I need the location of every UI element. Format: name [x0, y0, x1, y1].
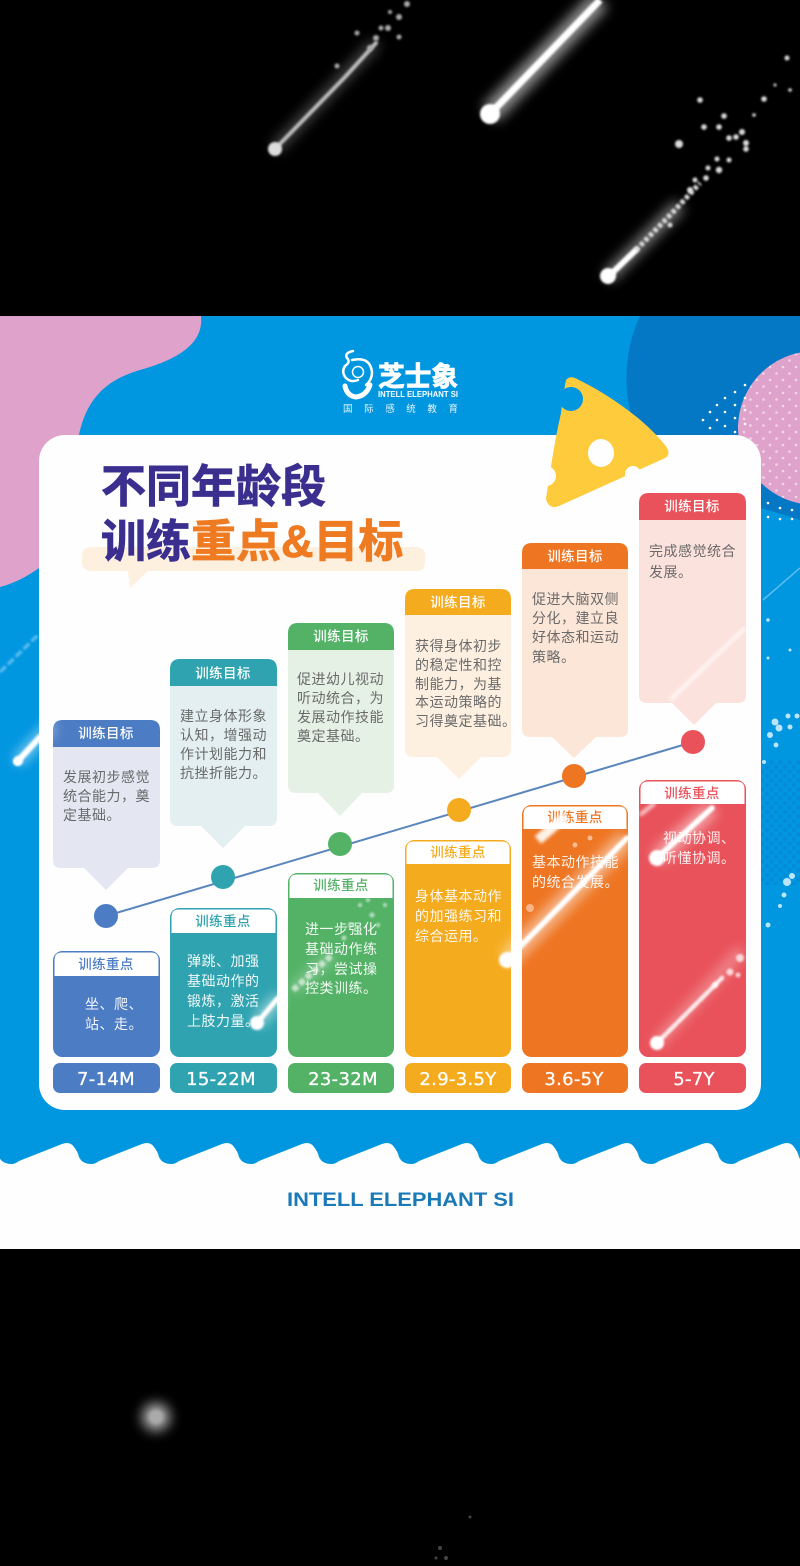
goal callout: 定基础。	[63, 807, 121, 823]
timeline line	[106, 742, 693, 916]
column 5: 3.6-5Y	[522, 543, 628, 1093]
focus box: 身体基本动作	[415, 888, 502, 904]
halftone dots	[702, 384, 793, 520]
focus box: 基础动作的	[187, 973, 260, 989]
title	[82, 461, 425, 588]
logo tagline: 国际感统教育	[343, 403, 458, 415]
age label: 5-7Y	[673, 1069, 715, 1090]
focus box: 基础动作练	[305, 941, 378, 957]
goal callout: 制能力，为基	[415, 676, 502, 692]
goal callout: 训练目标	[430, 594, 486, 610]
icon: elephant	[343, 351, 372, 397]
meteor overlay: right blue edge sparkles	[762, 568, 800, 928]
goal callout: 听动统合，为	[297, 690, 384, 706]
meteor overlay: column 6 upper	[640, 803, 712, 866]
meteor overlay: column 6 lower	[650, 950, 744, 1050]
halftone texture right edge	[761, 760, 800, 885]
timeline dot	[562, 764, 586, 788]
goal callout	[639, 493, 746, 725]
focus box: 训练重点	[547, 809, 603, 825]
age label	[639, 1063, 746, 1093]
meteor: bright center	[480, 0, 600, 124]
focus box: 训练重点	[313, 877, 369, 893]
focus box: 的加强练习和	[415, 908, 502, 924]
goal callout	[170, 659, 277, 848]
age label	[522, 1063, 628, 1093]
goal callout: 训练目标	[313, 628, 369, 644]
focus box: 基本动作技能	[532, 854, 619, 870]
focus box: 训练重点	[78, 956, 134, 972]
goal callout: 促进大脑双侧	[532, 591, 619, 607]
title highlight bubble	[82, 547, 425, 588]
goal callout: 发展。	[649, 564, 692, 580]
goal callout: 的稳定性和控	[415, 657, 502, 673]
goal callout: 统合能力，奠	[63, 788, 150, 804]
goal callout: 完成感觉统合	[649, 543, 736, 559]
age label	[405, 1063, 511, 1093]
column 4: 2.9-3.5Y	[405, 589, 516, 1093]
focus box: 训练重点	[430, 844, 486, 860]
meteor: sparkling right	[600, 56, 792, 284]
goal callout: 训练目标	[664, 498, 720, 514]
footer brand text: INTELL ELEPHANT SI	[287, 1190, 514, 1211]
meteor sparkles: bottom	[434, 1516, 472, 1560]
timeline dot	[681, 730, 705, 754]
goal callout	[522, 543, 628, 758]
focus box: 训练重点	[664, 785, 720, 801]
column 1: 7-14M	[53, 720, 160, 1093]
column 2: 15-22M	[170, 659, 277, 1093]
age label: 3.6-5Y	[544, 1069, 604, 1090]
timeline dot	[211, 865, 235, 889]
goal callout: 促进幼儿视动	[297, 671, 384, 687]
logo name: 芝士象	[378, 362, 458, 392]
focus box: 习，尝试操	[305, 961, 378, 977]
footer wave white shape	[0, 1143, 800, 1210]
meteor: dim upper left	[268, 1, 410, 156]
column 6: 5-7Y	[639, 493, 746, 1093]
title line two: 训练重点&目标	[101, 516, 404, 567]
pink dotted circle	[735, 350, 800, 510]
goal callout: 分化，建立良	[532, 610, 619, 626]
goal callout: 认知，增强动	[180, 727, 267, 743]
age label	[53, 1063, 160, 1093]
icon: cheese	[536, 377, 669, 507]
goal callout: 训练目标	[78, 725, 134, 741]
age label: 7-14M	[77, 1069, 135, 1090]
focus box	[406, 840, 510, 1056]
goal callout: 作计划能力和	[180, 746, 267, 762]
focus box: 上肢力量。	[187, 1013, 260, 1029]
timeline dot	[447, 798, 471, 822]
goal callout: 训练目标	[547, 548, 603, 564]
goal callout	[288, 623, 394, 816]
age label: 2.9-3.5Y	[419, 1069, 497, 1090]
focus box	[522, 806, 628, 1056]
focus box: 站、走。	[85, 1016, 143, 1032]
timeline dot	[94, 904, 118, 928]
goal callout: 训练目标	[195, 665, 251, 681]
white main card	[39, 435, 761, 1110]
pink blob top left	[0, 316, 201, 587]
goal callout: 建立身体形象	[180, 708, 267, 724]
goal callout	[53, 720, 160, 890]
focus box: 坐、爬、	[85, 996, 143, 1012]
focus box: 听懂协调。	[663, 850, 736, 866]
logo	[343, 351, 458, 415]
goal callout: 习得奠定基础。	[415, 713, 516, 729]
focus box: 弹跳、加强	[187, 953, 260, 969]
goal callout: 好体态和运动	[532, 629, 619, 645]
goal callout: 本运动策略的	[415, 694, 502, 710]
meteor overlay: column 3	[293, 898, 387, 990]
focus box	[54, 952, 160, 1056]
focus box: 综合运用。	[415, 928, 488, 944]
title line one: 不同年龄段	[101, 461, 326, 512]
focus box	[288, 874, 394, 1056]
goal callout: 奠定基础。	[297, 728, 370, 744]
goal callout: 获得身体初步	[415, 638, 502, 654]
age label	[170, 1063, 277, 1093]
meteor overlay: left blue edge	[0, 635, 52, 766]
focus box: 训练重点	[195, 913, 251, 929]
focus box	[170, 908, 276, 1056]
age label	[288, 1063, 394, 1093]
decorative dark blue circle	[626, 316, 800, 520]
focus box: 视动协调、	[663, 830, 736, 846]
focus box: 锻炼，激活	[187, 993, 260, 1009]
age label: 23-32M	[308, 1069, 378, 1090]
goal callout: 策略。	[532, 649, 576, 665]
meteor glow: bottom blob	[142, 1403, 170, 1431]
meteor overlay: column 2	[250, 997, 280, 1030]
poster background	[0, 316, 800, 1249]
focus box	[640, 780, 746, 1056]
logo english name: INTELL ELEPHANT SI	[378, 389, 458, 399]
goal callout: 发展动作技能	[297, 709, 384, 725]
focus box: 进一步强化	[305, 921, 378, 937]
focus box: 的统合发展。	[532, 874, 619, 890]
goal callout	[405, 589, 516, 779]
goal callout: 抗挫折能力。	[180, 765, 267, 781]
focus box: 控类训练。	[305, 980, 378, 996]
meteor overlay: faint goal panel	[670, 628, 745, 700]
goal callout: 发展初步感觉	[63, 769, 150, 785]
timeline dot	[328, 832, 352, 856]
age label: 15-22M	[186, 1069, 256, 1090]
column 3: 23-32M	[288, 623, 394, 1093]
meteor overlay: columns 4 and 5	[499, 816, 627, 968]
